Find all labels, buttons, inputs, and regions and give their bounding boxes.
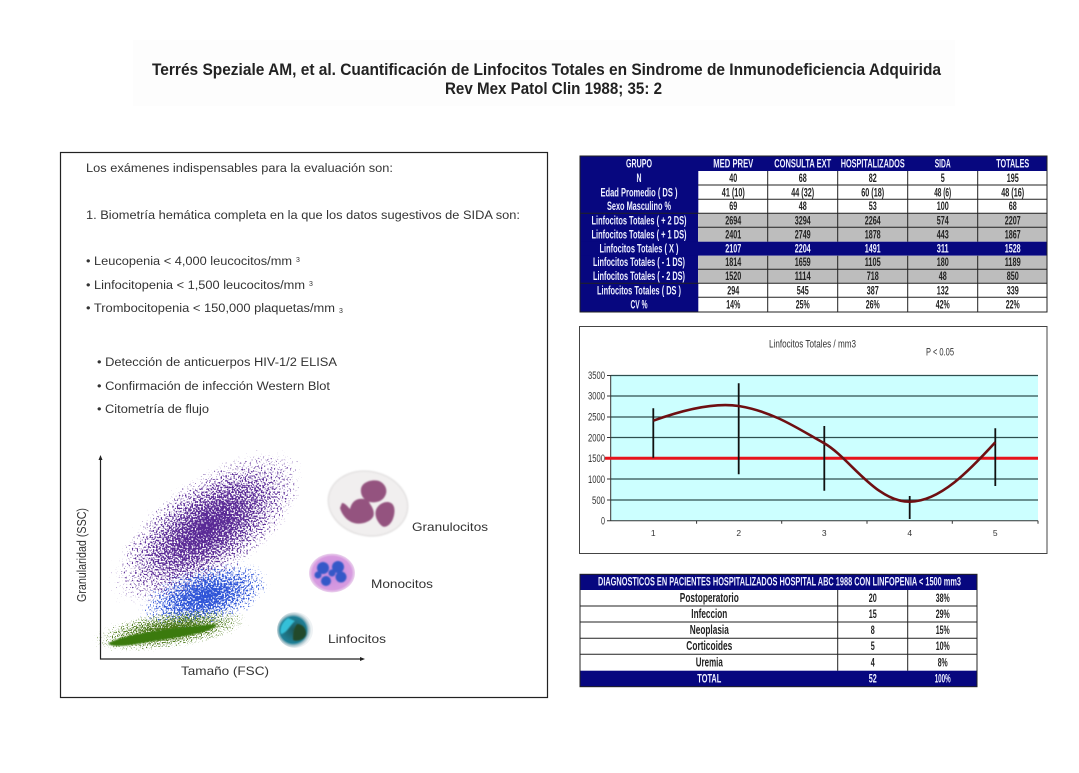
table row labels: MED PREV bbox=[713, 158, 754, 170]
table row labels: 2204 bbox=[795, 244, 811, 256]
title bbox=[133, 40, 955, 106]
text block: exámenes: Los exámenes indispensables para la evaluación son: bbox=[86, 161, 393, 175]
table rows: 8% bbox=[938, 658, 948, 670]
table values: 180 bbox=[937, 257, 949, 269]
y axis labels bbox=[588, 370, 605, 528]
text block: exámenes: • Citometría de flujo bbox=[97, 402, 209, 416]
table values: 1105 bbox=[865, 257, 881, 269]
table rows: 8 bbox=[871, 625, 875, 637]
y axis labels: 2000 bbox=[588, 432, 605, 444]
table row labels: GRUPO bbox=[626, 158, 652, 170]
table values: 48 bbox=[799, 201, 807, 213]
icon: monocito bbox=[309, 554, 355, 592]
table rows: 20 bbox=[869, 593, 877, 605]
table row labels: SIDA bbox=[935, 158, 951, 170]
text block: exámenes: 1. Biometría hemática completa en la que los datos sugestivos de SIDA son: bbox=[86, 208, 520, 222]
y axis labels: 1000 bbox=[588, 474, 605, 486]
table row labels: Linfocitos Totales ( DS ) bbox=[597, 285, 681, 297]
table values: 443 bbox=[937, 230, 949, 242]
table values: 2264 bbox=[865, 216, 881, 228]
table rows: Neoplasia bbox=[690, 623, 729, 637]
label: granulocitos: Granulocitos bbox=[412, 520, 488, 534]
text block: exámenes: • Trombocitopenia < 150,000 plaquetas/mm bbox=[86, 301, 335, 315]
table values: 82 bbox=[869, 173, 877, 185]
table values: 48 (6) bbox=[934, 188, 951, 200]
table values: 48 (16) bbox=[1001, 188, 1024, 200]
table values: 48 bbox=[939, 271, 947, 283]
table row labels: Linfocitos Totales ( + 1 DS) bbox=[592, 230, 687, 242]
text block: exámenes: • Detección de anticuerpos HIV-1/2 ELISA bbox=[97, 355, 338, 369]
table values: 2207 bbox=[1005, 216, 1021, 228]
title: Rev Mex Patol Clin 1988; 35: 2 bbox=[445, 80, 662, 98]
label: linfocitos: Linfocitos bbox=[328, 632, 386, 646]
table rows: Corticoides bbox=[686, 639, 732, 653]
x axis labels: 1 bbox=[651, 528, 656, 538]
x axis labels: 3 bbox=[822, 528, 827, 538]
table row labels: TOTALES bbox=[996, 158, 1029, 170]
table values: 718 bbox=[867, 271, 879, 283]
p value: P < 0.05 bbox=[926, 346, 954, 358]
table header and total bbox=[598, 577, 961, 686]
x axis labels: 4 bbox=[907, 528, 912, 538]
text block: exámenes: • Leucopenia < 4,000 leucocitos/mm bbox=[86, 254, 292, 268]
y axis labels: 500 bbox=[592, 495, 605, 507]
x axis labels: 2 bbox=[736, 528, 741, 538]
table row labels: 2107 bbox=[725, 244, 741, 256]
table row labels bbox=[592, 158, 1029, 311]
table rows: Postoperatorio bbox=[680, 591, 739, 605]
table values: 1189 bbox=[1005, 257, 1021, 269]
table values: 14% bbox=[726, 299, 740, 311]
icon: linfocito bbox=[277, 612, 313, 648]
chart title: Linfocitos Totales / mm3 bbox=[769, 338, 856, 350]
table row labels: CONSULTA EXT bbox=[774, 158, 831, 170]
table values: 41 (10) bbox=[722, 188, 745, 200]
scatter plot: citometría de flujo bbox=[74, 409, 365, 678]
table values: 3294 bbox=[795, 216, 811, 228]
table rows: 29% bbox=[936, 609, 950, 621]
axis label: granularidad: Granularidad (SSC) bbox=[75, 508, 89, 602]
table values: 100 bbox=[937, 201, 949, 213]
text block: exámenes bbox=[86, 161, 520, 416]
error bars bbox=[653, 383, 995, 519]
table values: 68 bbox=[799, 173, 807, 185]
table values: 5 bbox=[941, 173, 945, 185]
table values: 68 bbox=[1009, 201, 1017, 213]
x axis labels bbox=[651, 528, 998, 538]
table values: 132 bbox=[937, 285, 949, 297]
y axis labels: 1500 bbox=[588, 453, 605, 465]
table values: 44 (32) bbox=[791, 188, 814, 200]
plot area bbox=[611, 375, 1038, 521]
text block: exámenes: 3 bbox=[296, 257, 300, 264]
table row labels: Linfocitos Totales ( + 2 DS) bbox=[592, 216, 687, 228]
table values: 2749 bbox=[795, 230, 811, 242]
table row labels: Linfocitos Totales ( - 2 DS) bbox=[593, 271, 685, 283]
scatter: monocitos bbox=[123, 543, 287, 649]
line chart: linfocitos totales bbox=[580, 326, 1047, 554]
title: Terrés Speziale AM, et al. Cuantificación de Linfocitos Totales en Sindrome de Inmunodeficiencia Adquirida bbox=[152, 61, 942, 79]
table row labels: Linfocitos Totales ( X ) bbox=[600, 244, 679, 256]
y axis labels: 3500 bbox=[588, 370, 605, 382]
table row labels: 1491 bbox=[865, 244, 881, 256]
label: monocitos: Monocitos bbox=[371, 577, 433, 591]
table values: 850 bbox=[1007, 271, 1019, 283]
table values: 1814 bbox=[725, 257, 742, 269]
table values: 42% bbox=[936, 299, 950, 311]
table values: 195 bbox=[1007, 173, 1019, 185]
table values: 1520 bbox=[725, 271, 741, 283]
table rows: 10% bbox=[936, 641, 950, 653]
table rows: 4 bbox=[871, 658, 875, 670]
table row labels: HOSPITALIZADOS bbox=[841, 158, 905, 170]
table rows: 15 bbox=[869, 609, 877, 621]
table values: 69 bbox=[729, 201, 737, 213]
table row labels: 311 bbox=[937, 244, 949, 256]
table rows: Infeccion bbox=[691, 607, 727, 621]
table values: 25% bbox=[796, 299, 810, 311]
table values: 53 bbox=[869, 201, 877, 213]
table row labels: Linfocitos Totales ( - 1 DS) bbox=[593, 257, 685, 269]
text block: exámenes: 3 bbox=[309, 281, 313, 288]
table values: 1867 bbox=[1005, 230, 1021, 242]
icon: granulocito bbox=[322, 464, 414, 543]
table values: 2694 bbox=[725, 216, 742, 228]
table row labels: Sexo Masculino % bbox=[607, 201, 671, 213]
table values: 40 bbox=[729, 173, 737, 185]
table row labels: Edad Promedio ( DS ) bbox=[600, 188, 678, 200]
x axis labels: 5 bbox=[993, 528, 998, 538]
table values: 574 bbox=[937, 216, 949, 228]
scatter: linfocitos bbox=[80, 597, 260, 663]
reference line 1500 bbox=[605, 457, 1038, 460]
table header and total: TOTAL bbox=[697, 674, 721, 686]
table values: 545 bbox=[797, 285, 809, 297]
y axis labels: 0 bbox=[601, 516, 605, 528]
axis label: tamaño: Tamaño (FSC) bbox=[181, 664, 269, 678]
table header and total: 100% bbox=[935, 674, 951, 686]
scatter: granulocitos bbox=[74, 409, 342, 647]
table row labels: N bbox=[636, 173, 642, 185]
table values: 387 bbox=[867, 285, 879, 297]
table values: 60 (18) bbox=[861, 188, 884, 200]
table rows bbox=[680, 591, 950, 670]
table values: 2401 bbox=[725, 230, 742, 242]
text block: exámenes: • Linfocitopenia < 1,500 leucocitos/mm bbox=[86, 278, 305, 292]
table values: 1878 bbox=[865, 230, 881, 242]
text block: exámenes: 3 bbox=[339, 308, 343, 315]
mean curve bbox=[653, 405, 995, 502]
y axis labels: 2500 bbox=[588, 412, 605, 424]
table values bbox=[722, 173, 1024, 311]
table: diagnósticos bbox=[580, 574, 977, 687]
table row labels: CV % bbox=[630, 299, 648, 311]
table values: 1114 bbox=[795, 271, 811, 283]
panel: exámenes indispensables bbox=[60, 152, 548, 698]
table row labels: 1528 bbox=[1005, 244, 1021, 256]
table values: 339 bbox=[1007, 285, 1019, 297]
y axis labels: 3000 bbox=[588, 390, 605, 402]
table rows: 38% bbox=[936, 593, 950, 605]
table values: 22% bbox=[1006, 299, 1020, 311]
table values: 294 bbox=[727, 285, 740, 297]
table values: 1659 bbox=[795, 257, 811, 269]
table header and total: 52 bbox=[869, 674, 877, 686]
table rows: 5 bbox=[871, 641, 875, 653]
table: grupos bbox=[580, 156, 1047, 312]
table rows: 15% bbox=[936, 625, 950, 637]
table values: 26% bbox=[866, 299, 880, 311]
text block: exámenes: • Confirmación de infección Western Blot bbox=[97, 379, 331, 393]
table rows: Uremia bbox=[696, 656, 723, 670]
chart axes bbox=[98, 455, 365, 661]
